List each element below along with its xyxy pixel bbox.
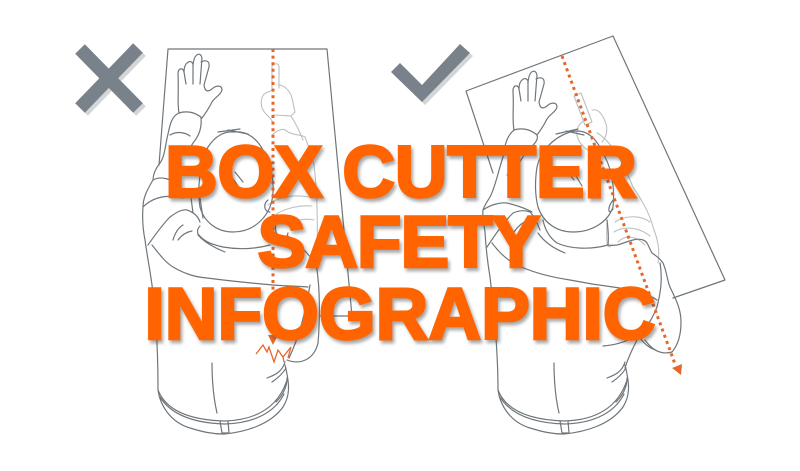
collar and shoulders: [492, 220, 657, 300]
panel: correct cutting posture: [391, 36, 725, 434]
title line 3: INFOGRAPHIC: [144, 274, 656, 355]
faint cutting arm: [261, 64, 317, 270]
icon: grey cross: [80, 48, 141, 111]
cut line with arrow: [268, 49, 278, 345]
impact burst: [256, 345, 291, 362]
icon: grey check mark: [391, 44, 473, 105]
title line 1: BOX CUTTER: [165, 132, 637, 213]
head: [536, 129, 614, 232]
torso and waistband: [158, 285, 310, 434]
cardboard sheet straight: [159, 49, 352, 316]
faint cutting arm: [574, 93, 659, 263]
collar and shoulders: [152, 222, 319, 362]
bent arm sleeve: [603, 239, 681, 368]
head: [199, 129, 273, 232]
left sleeve and upper arm: [483, 130, 540, 390]
title: [144, 132, 656, 355]
panel: incorrect cutting posture: [80, 48, 352, 434]
cardboard sheet angled: [466, 36, 725, 298]
cut line with arrow: [562, 56, 682, 375]
torso and waistband: [498, 362, 629, 434]
left sleeve and upper arm: [143, 113, 203, 390]
person with arm reaching along the cut line: [143, 54, 319, 434]
left hand: [513, 71, 557, 135]
person with arm angled away: [483, 71, 681, 434]
title line 2: SAFETY: [258, 202, 540, 283]
left hand: [178, 54, 222, 118]
